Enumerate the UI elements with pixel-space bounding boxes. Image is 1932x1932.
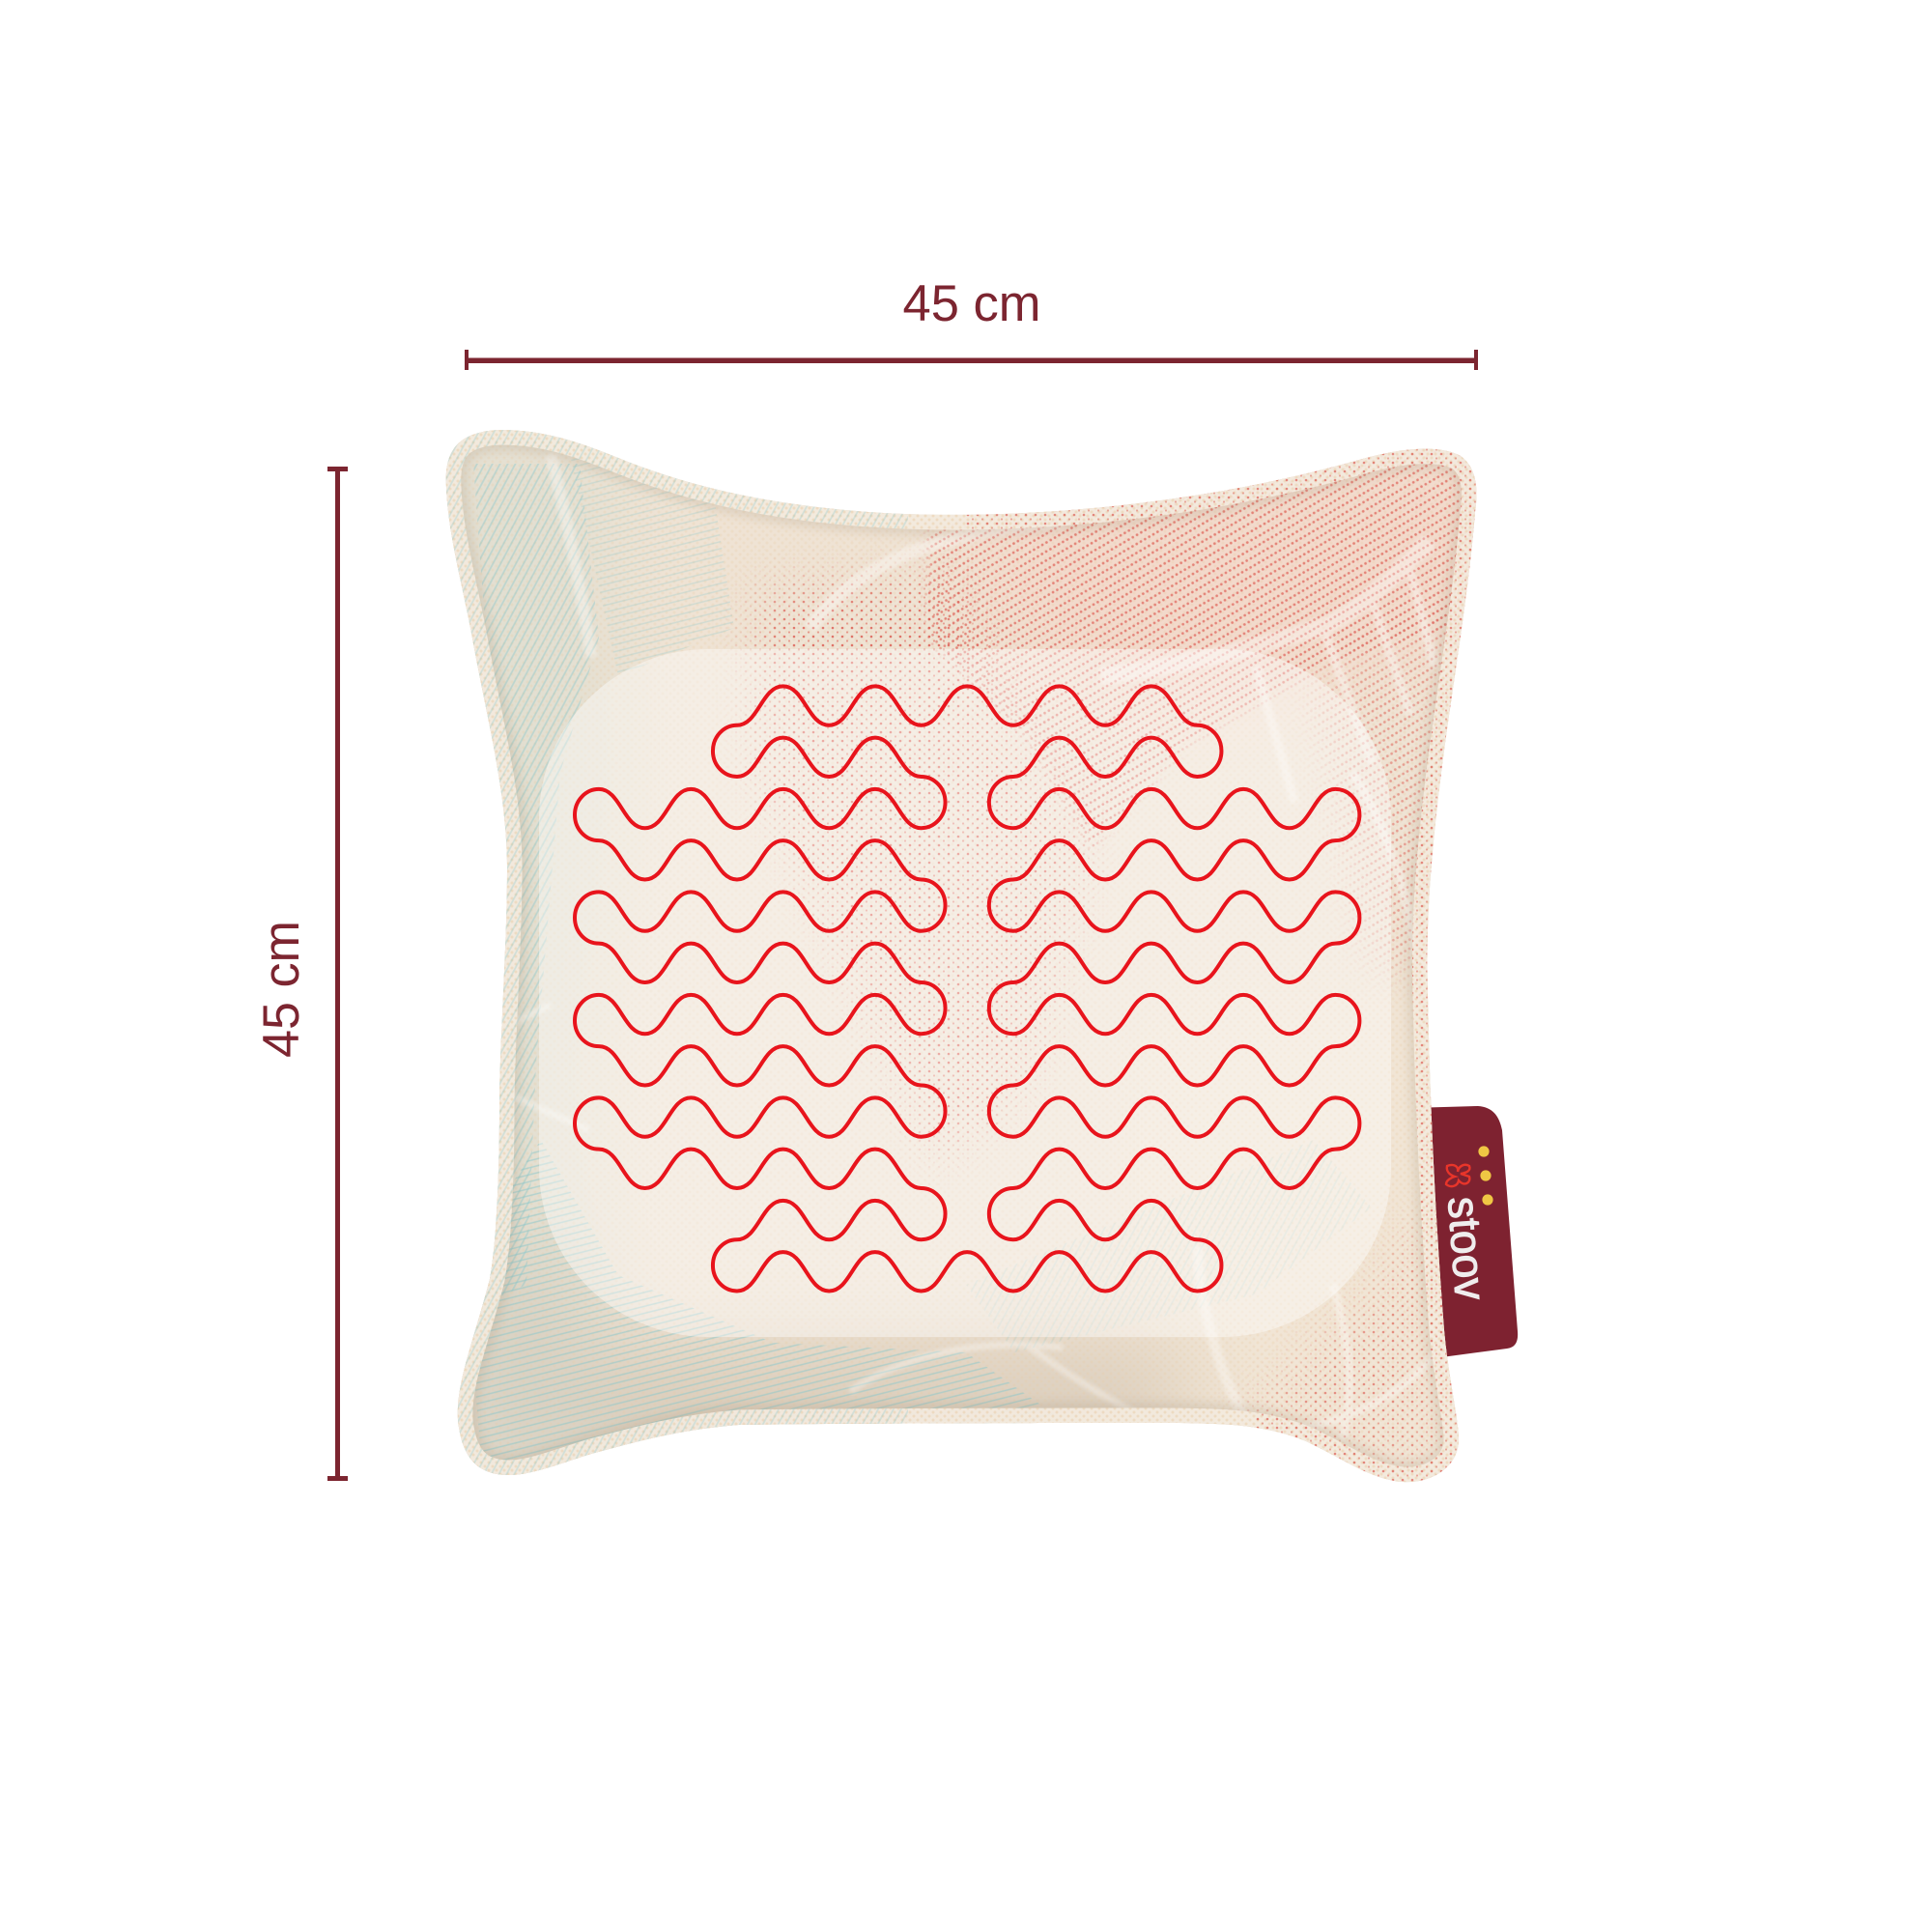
piping red weave <box>446 430 1476 1482</box>
right edge dots <box>1228 1201 1457 1472</box>
red dots <box>725 549 1104 1177</box>
heating wire loop <box>575 686 1359 1291</box>
cushion fabric <box>415 415 1507 1507</box>
cushion <box>415 415 1507 1507</box>
vertical dimension bar <box>327 467 348 1481</box>
tag yellow dots <box>1478 1146 1493 1206</box>
tag body <box>1410 1106 1518 1360</box>
white leaf veins <box>502 454 1439 1439</box>
soft colour zones <box>462 449 1453 1463</box>
piping <box>446 430 1476 1482</box>
lower right panel stripes <box>966 1140 1372 1352</box>
sand dots <box>462 445 1461 1466</box>
brand tag <box>1410 1106 1518 1360</box>
horizontal dimension label: 45 cm <box>902 275 1041 332</box>
vertical dimension label: 45 cm <box>253 921 310 1058</box>
tag brand name: stoov <box>1438 1195 1496 1301</box>
lower left stripes <box>464 1140 1063 1478</box>
red stripes <box>922 448 1476 849</box>
tag red logo <box>1446 1165 1469 1186</box>
top left stripes <box>570 454 734 676</box>
infographic canvas <box>263 285 1519 1482</box>
right upper dots <box>1302 605 1461 990</box>
heating zone panel <box>539 649 1391 1337</box>
horizontal dimension bar <box>465 350 1478 370</box>
teal stripes <box>473 464 599 1304</box>
piping teal weave <box>446 430 1476 1482</box>
piping shadow <box>446 430 1476 1482</box>
piping sand weave <box>446 430 1476 1482</box>
